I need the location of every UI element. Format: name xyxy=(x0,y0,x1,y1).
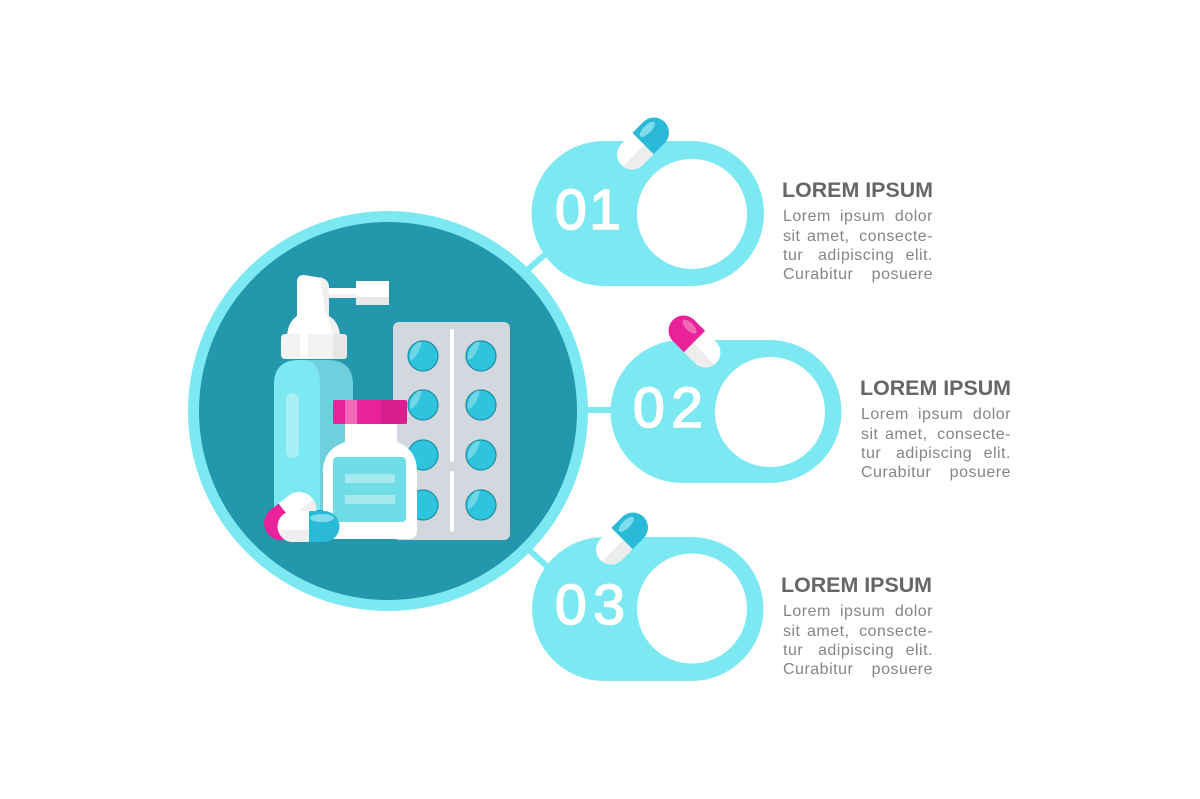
pill shape 03 xyxy=(532,537,763,681)
icon: blister pack xyxy=(393,322,510,540)
text block 02: consecte- xyxy=(937,426,1011,443)
text block 01: Curabitur xyxy=(783,266,853,283)
heading 01: LOREM IPSUM xyxy=(782,178,933,202)
text block 01: elit. xyxy=(906,247,933,264)
heading 03: LOREM IPSUM xyxy=(781,573,932,597)
text block 01: ipsum xyxy=(840,208,885,225)
text block 02: sit xyxy=(861,426,879,443)
text block 02: amet, xyxy=(885,426,928,443)
text block 03: ipsum xyxy=(840,603,885,620)
text block 03: posuere xyxy=(872,661,933,678)
text block 02: ipsum xyxy=(918,406,963,423)
text block 02: adipiscing xyxy=(896,445,972,462)
text block 02: Curabitur xyxy=(861,464,931,481)
text block 01: adipiscing xyxy=(818,247,894,264)
heading 02: LOREM IPSUM xyxy=(860,376,1011,400)
text block 02: tur xyxy=(861,445,881,462)
text block 03: amet, xyxy=(807,623,850,640)
text block 03: sit xyxy=(783,623,801,640)
pill shape 02 xyxy=(610,340,842,483)
text block 01: sit xyxy=(783,228,801,245)
text block 01: consecte- xyxy=(859,228,933,245)
text block 03: tur xyxy=(783,642,803,659)
text block 03: Lorem xyxy=(783,603,831,620)
text block 01 xyxy=(783,208,933,283)
text block 01: tur xyxy=(783,247,803,264)
panel: step 03 xyxy=(532,506,933,681)
icon: nasal spray bottle xyxy=(274,275,389,510)
icon: loose capsules xyxy=(257,485,340,547)
text block 02: elit. xyxy=(984,445,1011,462)
text block 01: amet, xyxy=(807,228,850,245)
text block 03: elit. xyxy=(906,642,933,659)
panel: main circle xyxy=(188,211,588,611)
icon: medicine jar xyxy=(323,400,417,539)
text block 02: dolor xyxy=(973,406,1011,423)
text block 03 xyxy=(783,603,933,678)
panel: step 01 xyxy=(532,111,933,286)
icon: capsule 03 xyxy=(590,506,654,571)
number 01: 01 xyxy=(555,178,621,242)
text block 02: Lorem xyxy=(861,406,909,423)
icon: capsule 02 xyxy=(662,309,727,374)
text block 03: adipiscing xyxy=(818,642,894,659)
text block 03: Curabitur xyxy=(783,661,853,678)
connectors between main circle and steps xyxy=(525,250,614,570)
text block 03: consecte- xyxy=(859,623,933,640)
pill shape 01 xyxy=(532,141,764,286)
number 02: 02 xyxy=(633,376,703,440)
text block 01: Lorem xyxy=(783,208,831,225)
icon: capsule 01 xyxy=(611,111,675,176)
number 03: 03 xyxy=(555,573,625,637)
panel: step 02 xyxy=(610,309,1011,483)
text block 02 xyxy=(861,406,1011,481)
text block 01: posuere xyxy=(872,266,933,283)
text block 03: dolor xyxy=(895,603,933,620)
text block 01: dolor xyxy=(895,208,933,225)
text block 02: posuere xyxy=(950,464,1011,481)
